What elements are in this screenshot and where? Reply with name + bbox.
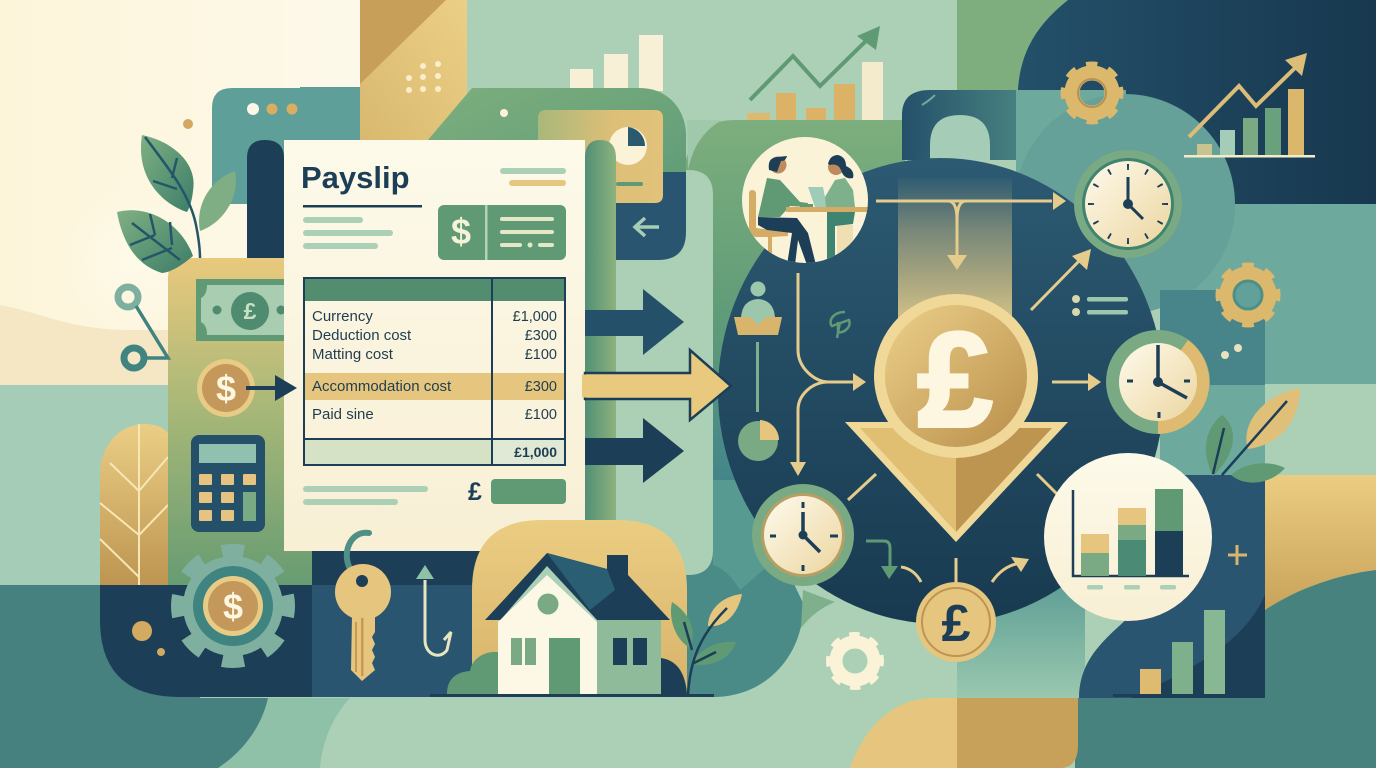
panel: large navy circle xyxy=(718,158,1164,624)
icon: gold gear top xyxy=(1065,66,1119,120)
icon: person at desk xyxy=(734,282,782,412)
panel: payslip document xyxy=(284,140,585,551)
icon: hook arrow xyxy=(416,565,451,655)
panel: lock top shape xyxy=(902,90,1016,160)
arrow: gold accommodation xyxy=(582,350,731,420)
bullet list icon xyxy=(1072,295,1128,316)
navy tab behind payslip xyxy=(247,140,284,258)
icon: clock top right xyxy=(1074,150,1182,258)
chart: bottom right bars xyxy=(1113,610,1265,697)
footer lines and total tab: £ xyxy=(468,478,482,506)
icon: gear with dollar coin: $ xyxy=(223,586,243,627)
table xyxy=(786,207,868,212)
icon: key xyxy=(335,533,391,681)
icon: pound coin small: £ xyxy=(942,595,971,653)
panel: navy tab with back arrow xyxy=(615,172,686,260)
panel: green card behind payslip xyxy=(422,88,686,215)
deductions table: Currency xyxy=(312,308,373,325)
laptop xyxy=(808,187,827,207)
panel: gold card with pie chart xyxy=(538,110,663,203)
chair xyxy=(749,190,788,256)
bar chart: cream bars top centre xyxy=(570,35,663,91)
small dot on green card xyxy=(500,109,508,117)
light beam above coin xyxy=(898,178,1012,348)
icon: dollar card: $ xyxy=(451,211,471,252)
heading: Payslip: Payslip xyxy=(301,160,410,195)
glyph: small squiggle xyxy=(831,312,850,338)
panel: bar chart circle xyxy=(1044,453,1212,621)
rising chart with green arrow xyxy=(747,26,883,122)
icon: cream gear xyxy=(830,636,880,686)
arrow: from dollar coin to table xyxy=(246,375,297,401)
panel: window card with dots xyxy=(212,88,360,204)
deductions table: £100 xyxy=(525,347,557,363)
panel: lower navy band xyxy=(100,551,482,697)
deductions table: Accommodation cost xyxy=(312,378,452,395)
icon: gold leaf shape xyxy=(100,424,168,585)
deductions table xyxy=(304,278,565,465)
panel: sage card xyxy=(615,170,713,575)
icon: large gold down arrow xyxy=(845,422,1068,542)
icon: banknote: £ xyxy=(244,298,257,324)
deductions table: £300 xyxy=(525,328,557,344)
plus sign xyxy=(1228,545,1247,565)
icon: pound coin small xyxy=(916,582,996,662)
deductions table: Deduction cost xyxy=(312,327,412,344)
icon: connector nodes xyxy=(118,287,168,368)
icon: dollar coin xyxy=(197,359,255,417)
small cream dots xyxy=(1221,344,1242,359)
woman xyxy=(825,178,855,207)
icon: plant with leaves xyxy=(117,135,236,273)
text placeholder lines xyxy=(303,217,393,249)
icon: pound coin large: £ xyxy=(918,306,992,455)
arrow: coin to clock xyxy=(1052,373,1101,391)
arrow heads for top branch xyxy=(947,192,1066,270)
panel: green backdrop right of sage card xyxy=(686,120,905,480)
icon: leaves above navy block xyxy=(1206,388,1300,483)
deductions table: £300 xyxy=(525,379,557,395)
chart: top right bars with gold arrow xyxy=(1184,53,1315,158)
icon: clock right with gold ring xyxy=(1106,330,1210,434)
panel: phone panel with icons xyxy=(168,258,312,585)
panel: person meeting vignette xyxy=(742,137,868,265)
arrow: navy lower xyxy=(585,418,684,483)
small dot xyxy=(183,119,193,129)
man xyxy=(758,178,808,217)
icon: gold gear right xyxy=(1220,267,1276,323)
deductions table: £1,000 xyxy=(513,309,557,325)
deductions table: Paid sine xyxy=(312,406,374,423)
deductions table: Matting cost xyxy=(312,346,394,363)
icon: house xyxy=(430,553,714,697)
diagonal arrow to clock xyxy=(1031,249,1091,310)
footer lines and total tab xyxy=(303,478,566,506)
icon: clock lower left xyxy=(752,484,854,586)
panel: teal blob behind house xyxy=(600,480,835,697)
deductions table: £1,000 xyxy=(514,444,557,460)
arrow: navy upper xyxy=(585,289,684,355)
dot grid on gold panel xyxy=(406,61,441,93)
panel: gold blob behind house xyxy=(472,520,687,697)
icon: gear with dollar coin xyxy=(181,554,285,658)
panel: page roll xyxy=(585,140,616,520)
small flow arrows xyxy=(866,541,1029,582)
flow arrows: top branching xyxy=(876,201,1052,258)
connector ticks xyxy=(848,474,1058,582)
deductions table: £100 xyxy=(525,407,557,423)
flow arrows: left branch xyxy=(790,273,866,476)
icon: dollar coin: $ xyxy=(216,368,236,409)
icon: dollar card xyxy=(438,205,566,260)
icon: sprig near house xyxy=(671,594,742,695)
header accent lines xyxy=(500,168,566,186)
icon: calculator xyxy=(191,435,265,532)
icon: banknote xyxy=(196,279,286,341)
icon: pound coin large xyxy=(874,294,1038,458)
icon: pie chart xyxy=(738,420,779,461)
